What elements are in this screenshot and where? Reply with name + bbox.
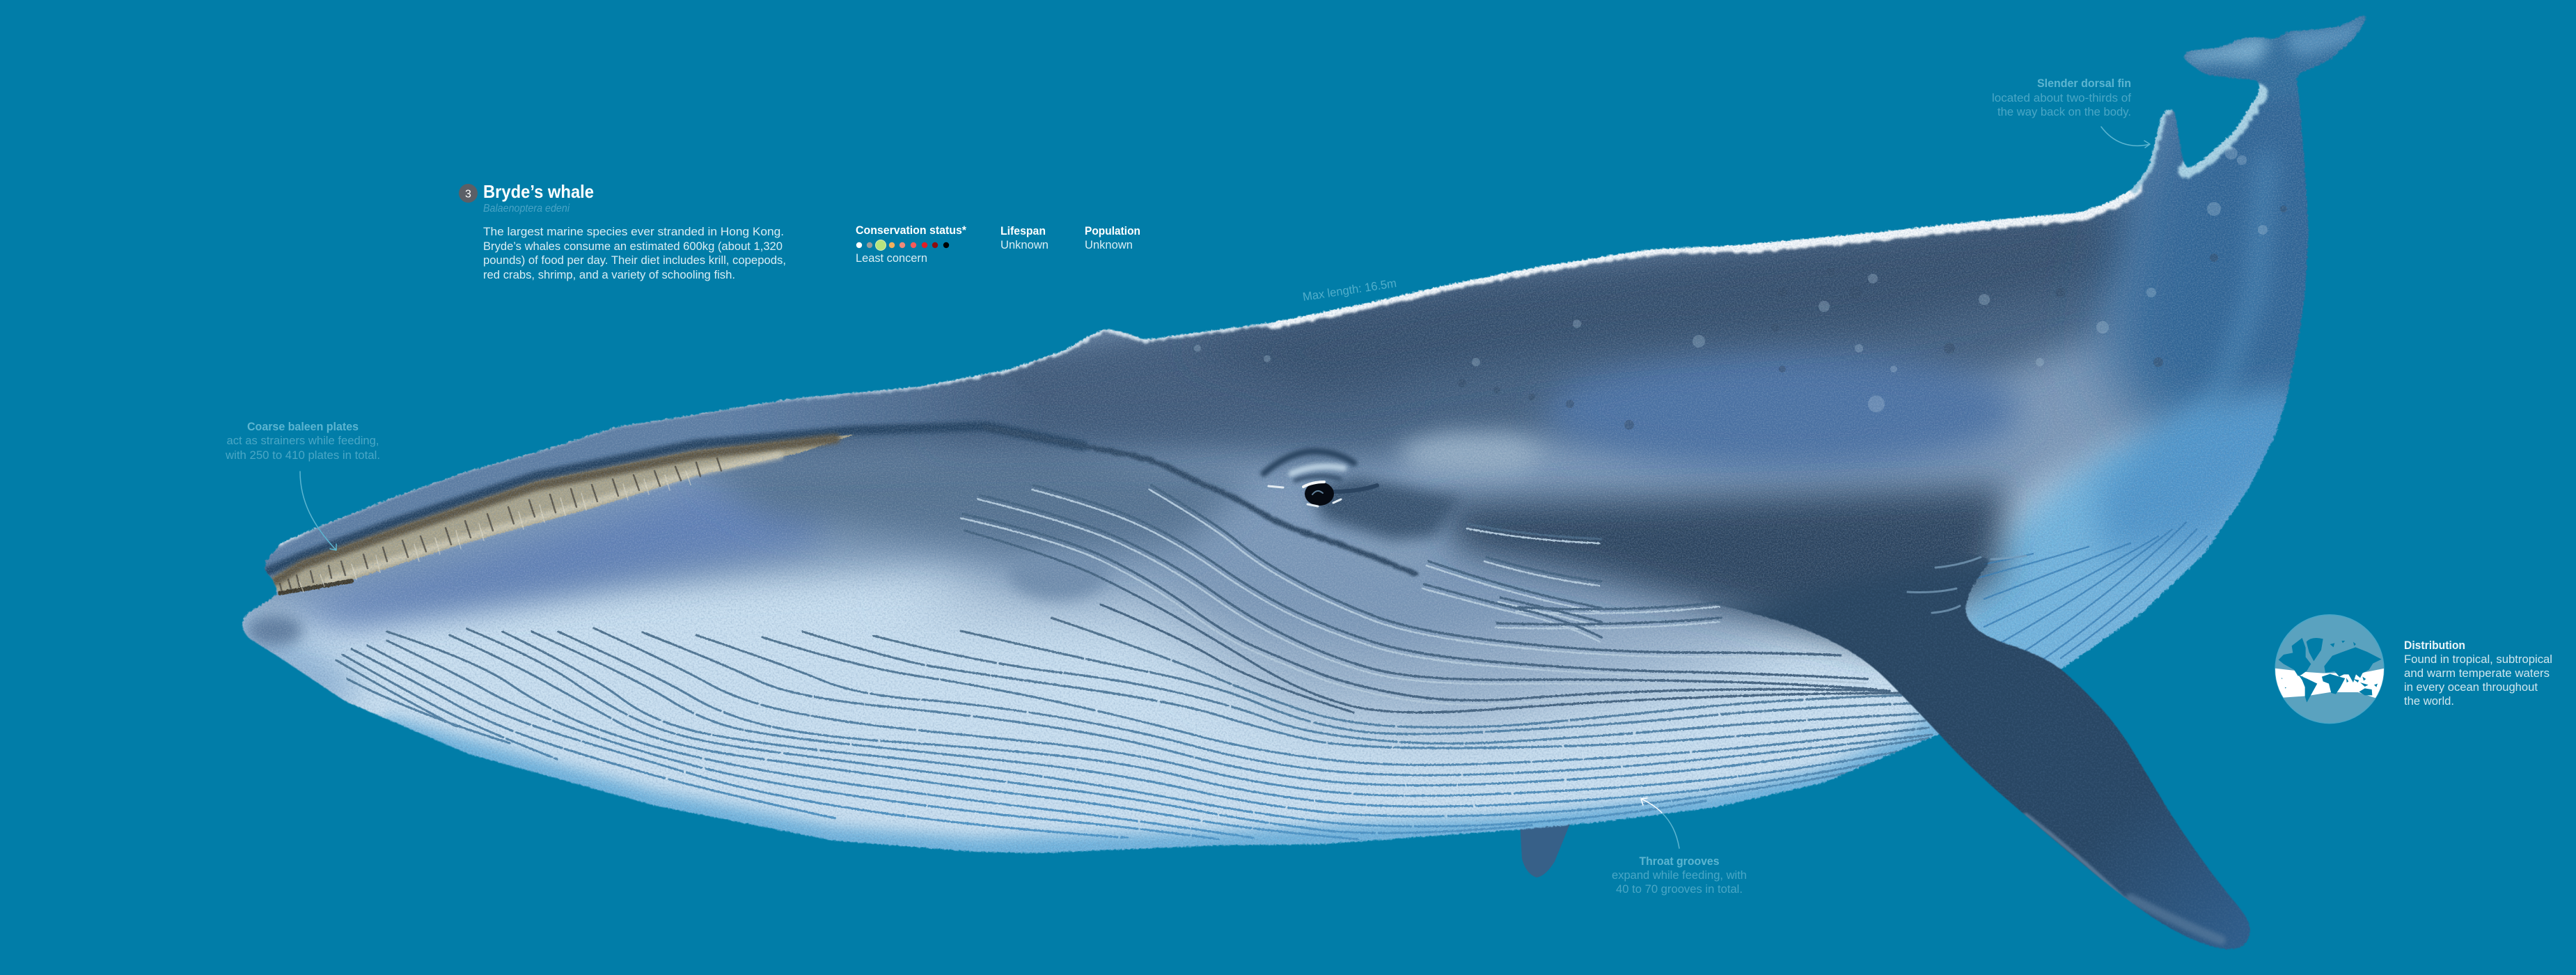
upper jaw [258,376,1083,577]
distribution text: and warm temperate waters [2404,666,2550,680]
skin spots [1194,147,2287,430]
lifespan: Unknown [1000,238,1049,251]
callout: baleen: act as strainers while feeding, [227,434,379,447]
title: Bryde’s whale [483,181,594,202]
distribution text: the world. [2404,694,2454,708]
population: Population [1085,224,1140,237]
description: pounds) of food per day. Their diet includes krill, copepods, [483,254,786,267]
callout: dorsal fin [1992,77,2150,148]
conservation status: Least concern [856,251,927,265]
population: Unknown [1085,238,1133,251]
callout: dorsal fin: the way back on the body. [1997,105,2131,118]
description: Bryde’s whales consume an estimated 600kg (about 1,320 [483,240,783,253]
conservation status [856,224,966,265]
number badge [459,184,478,203]
eye [1264,451,1377,506]
arrow: dorsal fin [2101,127,2150,148]
distribution text: Found in tropical, subtropical [2404,653,2552,666]
arrow: throat grooves [1641,798,1679,848]
description: red crabs, shrimp, and a variety of schooling fish. [483,268,735,281]
callout: throat grooves [1612,798,1747,896]
distribution text [2404,639,2552,708]
rear hatching grooves [1977,522,2207,662]
baleen plates [272,435,854,593]
population [1085,224,1140,251]
scientific name: Balaenoptera edeni [483,203,570,214]
callout: baleen: Coarse baleen plates [247,420,359,433]
description: The largest marine species ever stranded in Hong Kong. [483,225,784,238]
throat grooves: upper band [803,485,1925,748]
distribution text: in every ocean throughout [2404,680,2538,694]
distribution globe [2273,615,2386,724]
callout: dorsal fin: Slender dorsal fin [2037,77,2131,90]
callout: throat grooves: expand while feeding, with [1612,868,1747,882]
callout: throat grooves: Throat grooves [1639,855,1720,868]
distribution text: Distribution [2404,639,2465,652]
flipper crease marks [1908,556,2026,613]
icon: ventral fin [1520,820,1571,878]
lifespan [1000,224,1049,251]
title block [459,181,786,281]
range band [2273,668,2386,701]
rough white back edge [1272,245,1738,322]
arrow: baleen [300,471,336,550]
description [483,225,786,281]
callout: baleen [225,420,380,550]
pectoral flipper [1671,515,2298,975]
callout: dorsal fin: located about two-thirds of [1992,91,2131,104]
status scale dots [856,240,949,251]
conservation status: Conservation status* [856,224,966,237]
mouth line [986,428,1415,574]
whale body [242,15,2367,855]
callout: baleen: with 250 to 410 plates in total. [225,448,380,462]
callout: throat grooves: 40 to 70 grooves in total. [1616,882,1743,896]
number badge: 3 [465,188,471,201]
max length label: Max length: 16.5m [1302,276,1397,304]
lifespan: Lifespan [1000,224,1046,237]
land masses [2279,638,2382,703]
throat grooves: lower band [336,628,1932,839]
